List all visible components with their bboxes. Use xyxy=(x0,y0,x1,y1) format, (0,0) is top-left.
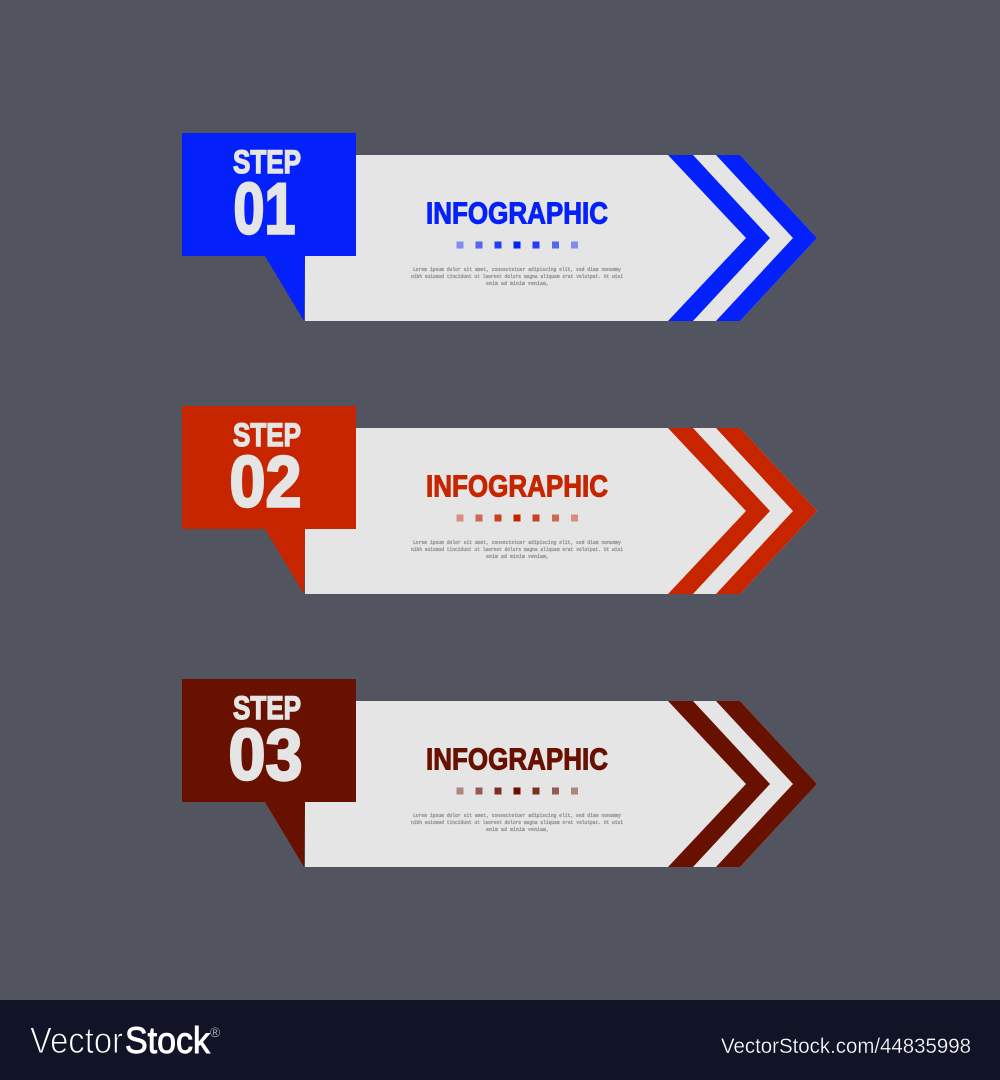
dotted divider xyxy=(456,788,578,794)
footer id: VectorStock.com/44835998 xyxy=(721,1035,971,1058)
body text: nibh euismod tincidunt ut laoreet dolore magna aliquam erat volutpat. Ut wisi xyxy=(411,273,624,280)
arrow banner body xyxy=(305,428,817,594)
panel: step 01 xyxy=(182,133,817,321)
step tag with tail xyxy=(182,133,356,321)
heading: INFOGRAPHIC xyxy=(426,742,608,776)
panel: step 03 xyxy=(182,679,817,867)
double chevron xyxy=(668,428,817,594)
footer bar xyxy=(0,1000,1000,1080)
heading: INFOGRAPHIC xyxy=(426,468,608,504)
footer logo: Stock xyxy=(125,1020,210,1061)
body text: Lorem ipsum dolor sit amet, consectetuer adipiscing elit, sed diam nonummy xyxy=(413,539,622,546)
body text xyxy=(411,812,624,833)
body text xyxy=(411,266,624,287)
body text: enim ad minim veniam, xyxy=(486,553,549,560)
step label: STEP xyxy=(233,417,301,453)
step label: STEP xyxy=(233,690,301,726)
step label: STEP xyxy=(233,144,301,180)
dotted divider xyxy=(456,514,578,522)
body text: Lorem ipsum dolor sit amet, consectetuer adipiscing elit, sed diam nonummy xyxy=(413,266,622,273)
body text xyxy=(411,539,624,560)
body text: enim ad minim veniam, xyxy=(486,280,549,287)
footer logo: Vector xyxy=(30,1020,123,1061)
double chevron xyxy=(668,155,817,321)
step number: 01 xyxy=(234,170,296,250)
heading: INFOGRAPHIC xyxy=(426,196,608,230)
step tag with tail xyxy=(182,406,356,594)
double chevron xyxy=(668,701,817,867)
footer logo xyxy=(30,1020,221,1061)
body text: nibh euismod tincidunt ut laoreet dolore magna aliquam erat volutpat. Ut wisi xyxy=(411,546,624,553)
dotted divider xyxy=(456,242,578,248)
arrow banner body xyxy=(305,701,817,867)
panel: step 02 xyxy=(182,406,817,594)
step tag with tail xyxy=(182,679,356,867)
body text: enim ad minim veniam, xyxy=(486,826,549,833)
step number: 02 xyxy=(230,442,302,522)
body text: nibh euismod tincidunt ut laoreet dolore magna aliquam erat volutpat. Ut wisi xyxy=(411,819,624,826)
body text: Lorem ipsum dolor sit amet, consectetuer adipiscing elit, sed diam nonummy xyxy=(413,812,622,819)
step number: 03 xyxy=(228,716,302,796)
arrow banner body xyxy=(305,155,817,321)
footer logo: ® xyxy=(210,1024,221,1040)
